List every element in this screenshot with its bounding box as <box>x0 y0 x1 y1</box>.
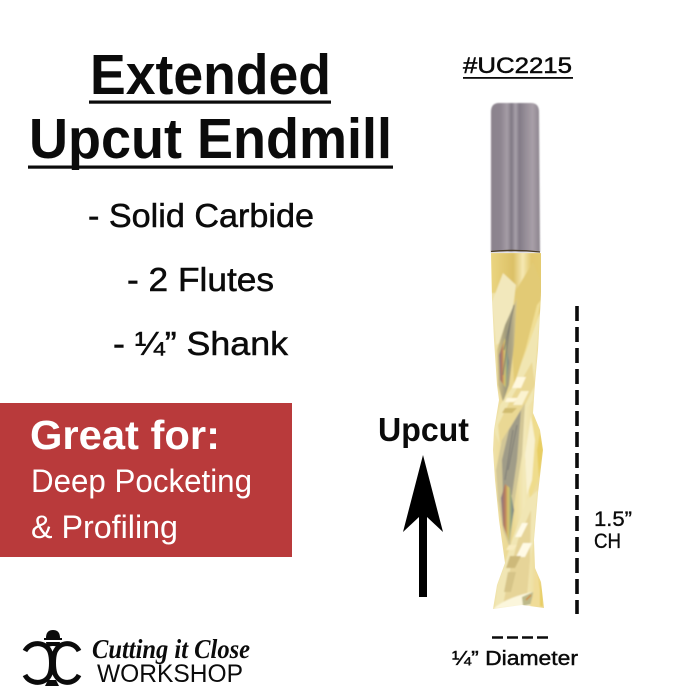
icon: workshop figure <box>25 630 79 686</box>
bit shank <box>491 103 540 252</box>
upper leaf facet <box>512 270 541 382</box>
lower right lobe <box>530 597 534 606</box>
tip <box>493 592 532 609</box>
center flute <box>496 403 525 548</box>
upper flute <box>497 298 517 402</box>
logo script: Cutting it Close <box>92 634 250 664</box>
part number: #UC2215 <box>463 53 572 78</box>
highlight tiles lower <box>515 523 528 537</box>
goggles <box>46 642 60 647</box>
label: cutting height <box>594 508 632 553</box>
helmet <box>44 630 62 640</box>
feature: 2 flutes: - 2 Flutes <box>127 261 274 298</box>
feature: solid carbide: - Solid Carbide <box>88 197 314 234</box>
shank collar line <box>491 250 540 252</box>
lower diagonal band <box>495 490 538 608</box>
arrow: upward <box>403 455 443 597</box>
title line: Upcut Endmill: Upcut Endmill <box>29 107 392 171</box>
diameter dashed line <box>492 636 549 639</box>
label: cutting height: CH <box>594 530 621 553</box>
upper pale facet <box>492 273 516 345</box>
panel text: Deep Pocketing: Deep Pocketing <box>31 463 252 499</box>
logo: Cutting it Close Workshop <box>25 630 250 688</box>
panel heading: Great for: Great for: <box>30 412 220 458</box>
foot <box>45 680 59 686</box>
flute length dashed line <box>575 306 579 614</box>
label: upcut: Upcut <box>378 411 469 448</box>
title line: Extended: Extended <box>90 43 331 107</box>
feature: quarter inch shank: - ¼” Shank <box>113 325 289 362</box>
label: diameter: ¼” Diameter <box>452 648 578 670</box>
title: Extended Upcut Endmill <box>28 43 393 171</box>
upper diagonal band <box>494 310 541 445</box>
logo workshop: WORKSHOP <box>97 660 243 688</box>
panel text: and Profiling: & Profiling <box>31 509 178 545</box>
endmill bit <box>490 102 544 609</box>
label: cutting height: 1.5” <box>594 508 632 531</box>
highlight tiles upper <box>512 377 526 388</box>
bit flutes <box>491 253 544 609</box>
panel: great for <box>0 403 292 557</box>
right outer band <box>528 414 540 497</box>
feature list <box>88 197 314 362</box>
